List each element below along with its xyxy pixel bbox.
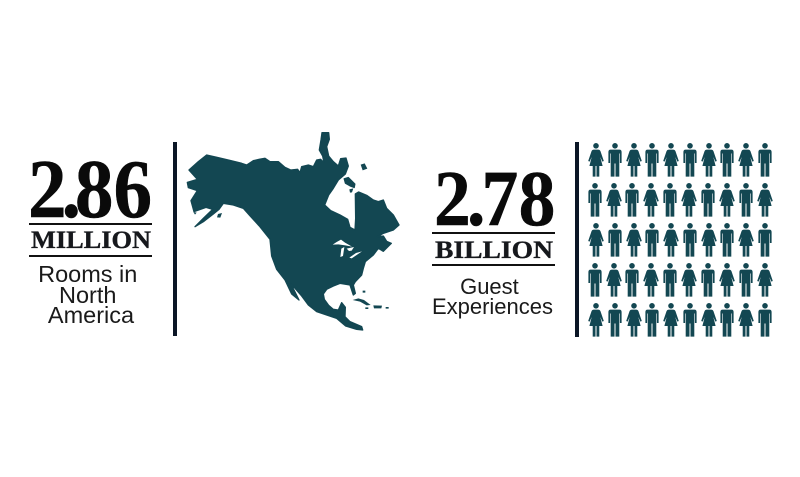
label: guest experiences: Guest: [460, 274, 519, 299]
pictogram: people grid: [588, 143, 773, 337]
panel: rooms statistic: [28, 143, 152, 328]
great lakes: [333, 240, 362, 258]
unit: MILLION: MILLION: [31, 227, 151, 254]
islands: Caribbean and Arctic: [193, 163, 389, 309]
bottom rule: [29, 255, 152, 257]
label: rooms in North America: America: [48, 302, 135, 328]
unit: BILLION: BILLION: [435, 237, 553, 264]
right vertical divider: [575, 142, 579, 337]
big number: 2.86: 2.86: [28, 143, 152, 236]
left vertical divider: [173, 142, 177, 336]
big number: 2.78: 2.78: [434, 154, 555, 243]
label: guest experiences: Experiences: [432, 294, 553, 319]
top rule: [29, 223, 152, 225]
map: North America: [187, 133, 399, 330]
top rule: [432, 232, 555, 234]
bottom rule: [432, 264, 555, 266]
panel: guest statistic: [432, 154, 555, 319]
label: rooms in North America: Rooms in: [38, 261, 137, 287]
label: rooms in North America: North: [59, 282, 116, 308]
Baffin Island: [344, 177, 355, 188]
